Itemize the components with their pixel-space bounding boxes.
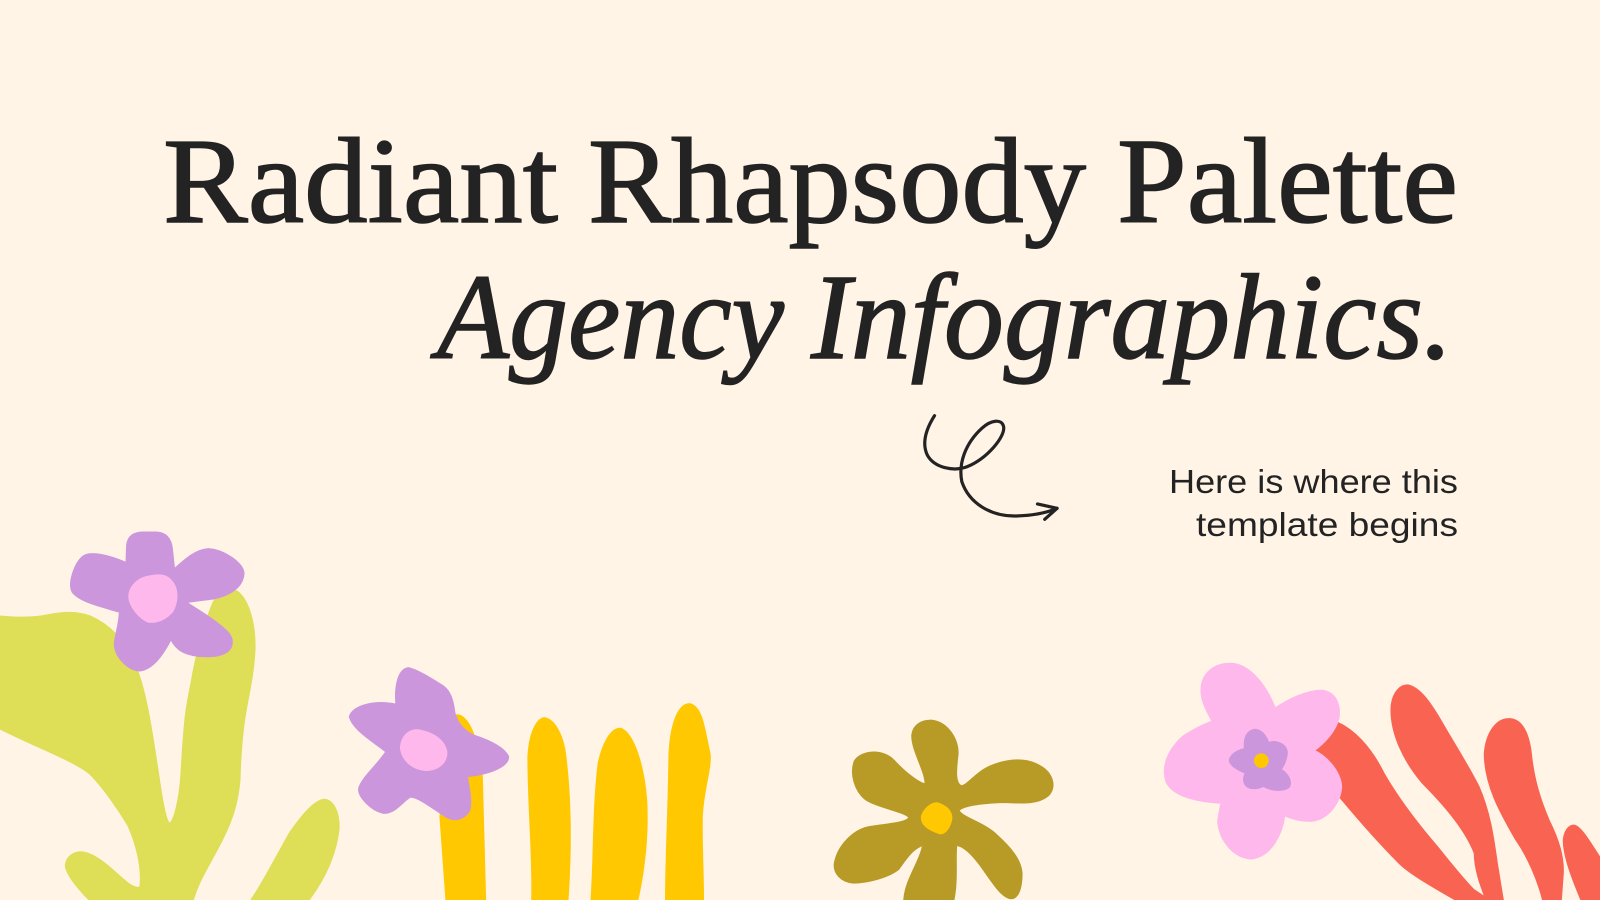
green leaves: [0, 591, 338, 900]
yellow stems: [441, 704, 710, 900]
subtitle text: [1169, 463, 1458, 543]
pink flower: [1165, 664, 1341, 858]
title: Rhapsody: [588, 114, 1086, 249]
subtitle text: template begins: [1196, 506, 1458, 543]
title: Agency: [430, 250, 785, 385]
title: Palette: [1117, 114, 1458, 249]
title: [163, 114, 1458, 385]
title: Radiant: [163, 114, 558, 249]
subtitle text: Here is where this: [1169, 463, 1458, 500]
purple flower, left: [71, 533, 243, 670]
purple flower, middle: [350, 668, 508, 819]
title: Infographics.: [810, 250, 1453, 385]
coral leaves: [1313, 686, 1600, 900]
arrow: curly hand-drawn arrow: [925, 416, 1057, 519]
olive flower: [836, 722, 1051, 900]
